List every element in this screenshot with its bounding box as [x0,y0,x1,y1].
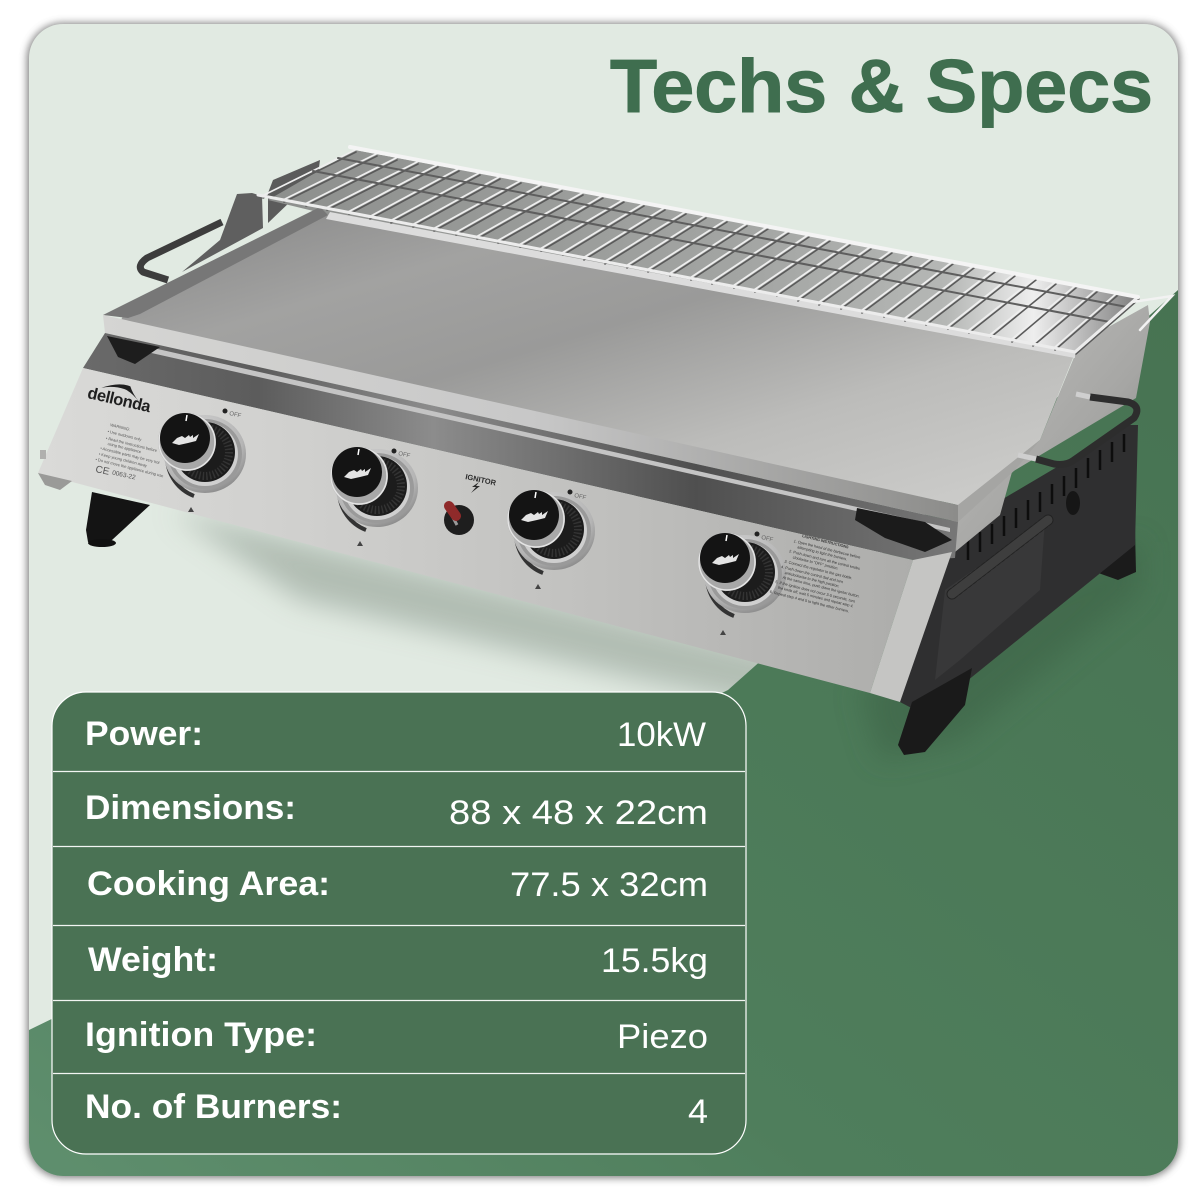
griddle right fold [958,440,1040,522]
left handle [140,222,222,280]
row: number of burners: 4 [688,1093,708,1131]
warning text: • Accessible parts may be very hot [100,445,161,465]
panel side strip [870,552,952,702]
griddle left rim [103,207,328,318]
rear foot [1090,530,1136,580]
CE mark [94,464,137,484]
row: ignition type: Piezo [617,1018,708,1056]
CE mark: 0063-22 [111,470,137,482]
panel left bottom lip [38,473,72,490]
panel bolt [40,450,46,459]
CE mark: CE [94,464,111,478]
row: power: 10kW [617,716,706,754]
channel band [83,333,958,560]
warning text [95,421,174,479]
row: cooking area [87,865,708,904]
griddle barbecue product illustration [38,147,1172,755]
row: ignition type: Ignition Type: [85,1016,317,1054]
knob 1: OFF [229,411,242,420]
row: dimensions: 88 x 48 x 22cm [449,794,708,832]
row: weight: Weight: [88,941,218,979]
warning text: using the appliance [107,441,143,454]
logo: dellonda [86,384,153,416]
lighting instructions: 3. Connect the regulator to the gas bottle. [784,560,853,580]
row: dimensions: Dimensions: [85,789,296,827]
row: number of burners [85,1088,708,1131]
row: weight [88,941,708,980]
row: cooking area: 77.5 x 32cm [510,866,708,904]
black body side [900,425,1138,715]
lighting instructions: 1. Open the hood of the barbecue before [793,539,861,560]
lighting instructions: attempting to light the burners. [797,545,848,562]
griddle plate [120,213,1075,505]
warning text: WARNING: [110,422,131,432]
warning text: • Do not move the appliance during use [95,457,165,479]
gas inlet [1066,491,1080,515]
ignitor label: IGNITOR [465,472,497,488]
icon: lightning bolt [471,482,480,493]
rear bracket left [268,160,320,223]
right handle [1036,397,1137,464]
rack back wall [268,150,1138,355]
warning text: • Use outdoors only [107,429,142,442]
warning text: • Keep young children away [98,451,148,468]
lighting instructions: the knob off, wait 5 minutes and repeat step 4. [778,586,854,608]
knob 2 [330,447,418,530]
griddle back lip [326,212,1075,358]
row: weight: 15.5kg [601,942,708,980]
vent slots [968,434,1124,560]
lighting instructions: 5. If the ignition does not occur 3-5 seconds, turn [775,580,856,604]
small arrow marks [188,507,726,635]
side grip [952,520,1048,594]
control panel [38,368,913,693]
hood right side [945,305,1150,552]
griddle bracket right [855,508,952,552]
row: cooking area: Cooking Area: [87,865,330,903]
ignitor button [444,505,474,535]
griddle bracket left [107,336,160,364]
lighting instructions: clockwise to "OFF" position. [792,555,839,571]
griddle front rim [103,315,958,522]
lighting instructions: 6. Repeat step 4 and 5 to light the other burners. [769,590,850,614]
specs table [52,692,746,1154]
row: number of burners: No. of Burners: [85,1088,342,1126]
row: power: Power: [85,715,203,753]
left bracket [182,193,263,272]
row: ignition type [85,1016,708,1056]
knob 3: OFF [574,493,587,502]
knob 2: OFF [398,451,411,460]
title: Techs & Specs [610,44,1153,128]
knob 4: OFF [761,535,774,544]
lighting instructions [769,530,871,615]
lighting instructions: At the same time, push down the ignitor button. [782,576,860,599]
front foot [898,668,972,755]
lighting instructions: 2. Push down and turn all the control knobs [789,549,860,571]
lighting instructions: anticlockwise to the high position. [784,571,840,588]
warning text: • Read the instructions before [105,435,158,453]
knob 1 [158,408,246,496]
knob 3 [507,490,595,573]
lighting instructions: LIGHTING INSTRUCTIONS [802,534,849,550]
row: dimensions [85,789,708,832]
left foot [86,492,150,542]
lighting instructions: 4. Push down the control dial and turn [781,565,844,584]
rack rails and bars [258,147,1172,354]
row: power [85,715,706,754]
knob 4 [698,532,786,616]
